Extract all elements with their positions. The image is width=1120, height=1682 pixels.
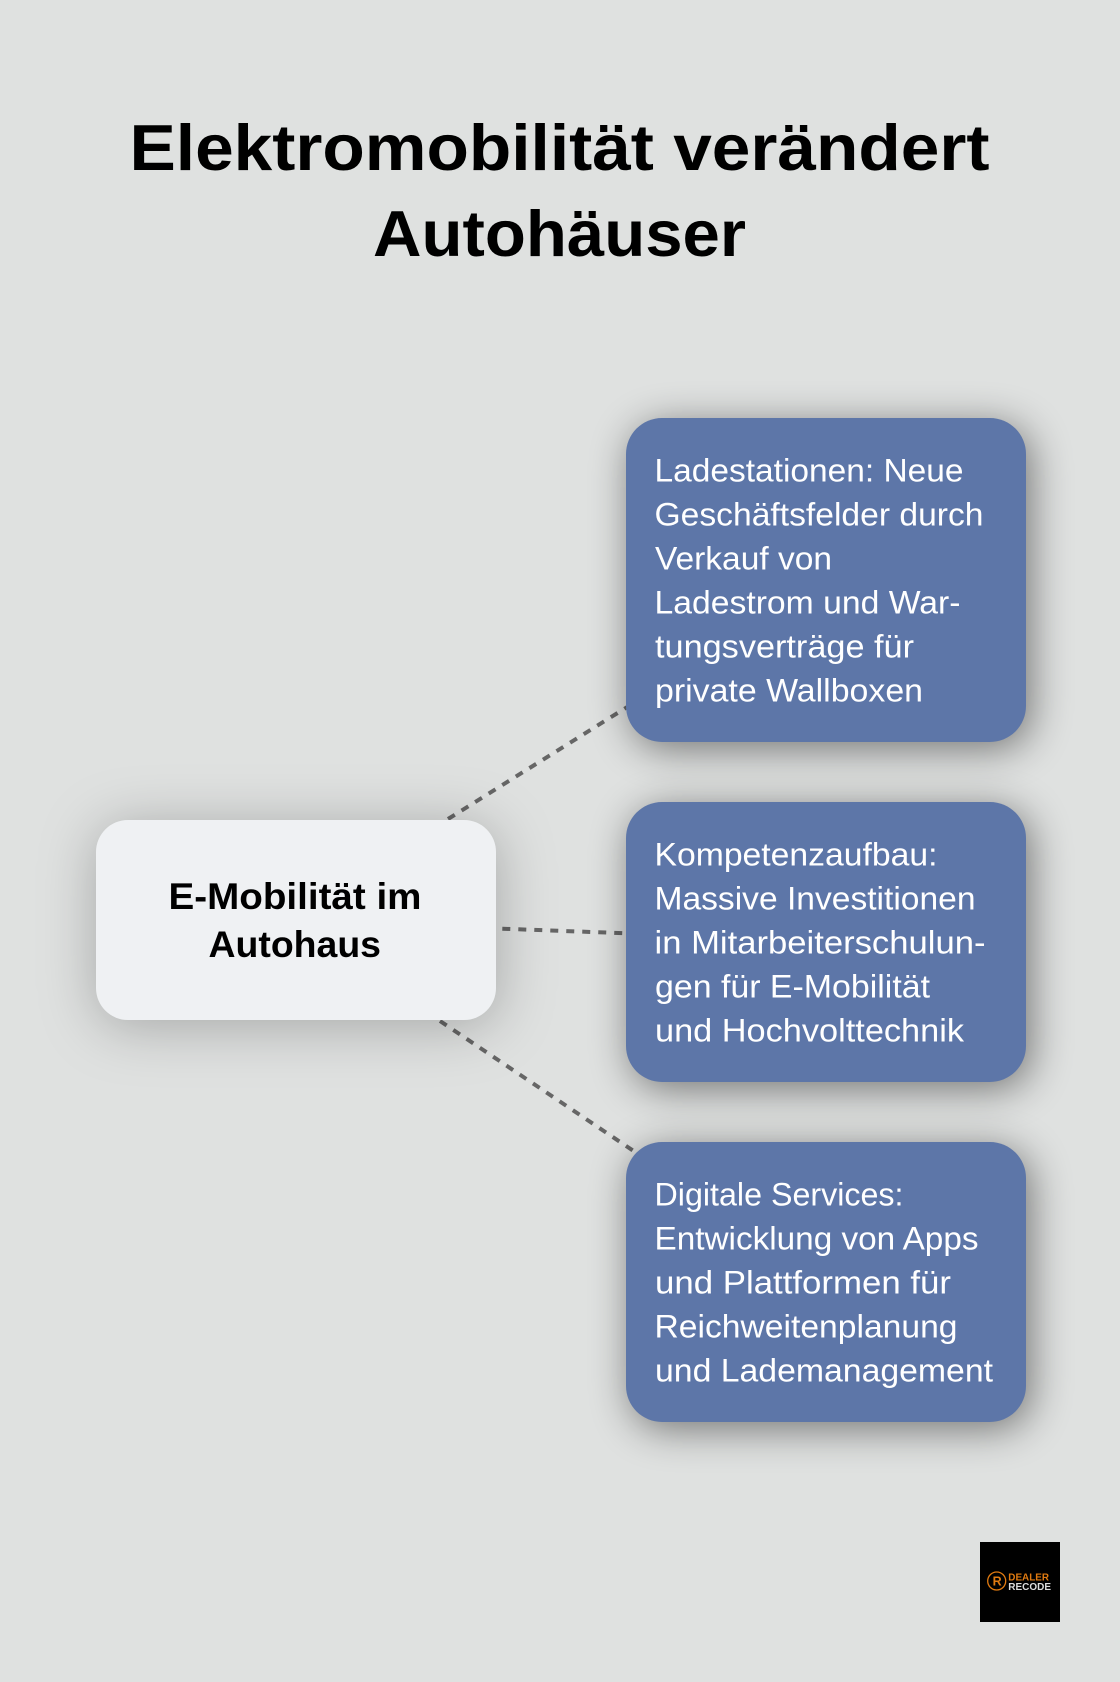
panel: Ladestationen: private Wallboxen (655, 673, 923, 709)
logo: Dealer Recode: R (993, 1575, 1002, 1589)
title: Elektromobilität verändert (130, 111, 990, 184)
panel: Digitale Services: und Plattformen für (655, 1265, 951, 1301)
panel: Ladestationen: Ladestationen: Neue (654, 453, 964, 489)
title (130, 111, 990, 270)
panel: Ladestationen: Verkauf von (655, 541, 832, 577)
panel: Kompetenzaufbau: in Mitarbeiterschulun- (654, 925, 986, 961)
panel: Digitale Services: und Lademanagement (655, 1353, 993, 1389)
central node (96, 820, 496, 1020)
panel: Ladestationen (626, 418, 1026, 742)
connector: center to Digitale Services (440, 1021, 650, 1162)
panel: Ladestationen: tungsverträge für (655, 629, 914, 665)
panel: Kompetenzaufbau (626, 802, 1026, 1082)
panel: Kompetenzaufbau: gen für E-Mobilität (655, 969, 930, 1005)
logo: Dealer Recode: RECODE (1008, 1581, 1051, 1593)
central node: Autohaus (208, 924, 381, 965)
connector: center to Ladestationen (448, 699, 640, 819)
panel: Digitale Services: Digitale Services: (654, 1177, 904, 1213)
panel: Kompetenzaufbau: Massive Investitionen (654, 881, 976, 917)
connector: center to Kompetenzaufbau (502, 929, 640, 934)
panel: Ladestationen: Ladestrom und War- (654, 585, 960, 621)
panel: Kompetenzaufbau: und Hochvolttechnik (655, 1013, 965, 1049)
title: Autohäuser (373, 197, 746, 270)
logo: Dealer Recode (980, 1542, 1060, 1622)
panel: Digitale Services: Reichweitenplanung (654, 1309, 958, 1345)
panel: Ladestationen: Geschäftsfelder durch (654, 497, 984, 533)
logo: Dealer Recode: DEALER (1008, 1572, 1049, 1584)
panel: Digitale Services (626, 1142, 1026, 1422)
panel: Kompetenzaufbau: Kompetenzaufbau: (654, 837, 938, 873)
central node: E-Mobilität im (168, 876, 422, 917)
panel: Digitale Services: Entwicklung von Apps (654, 1221, 978, 1257)
